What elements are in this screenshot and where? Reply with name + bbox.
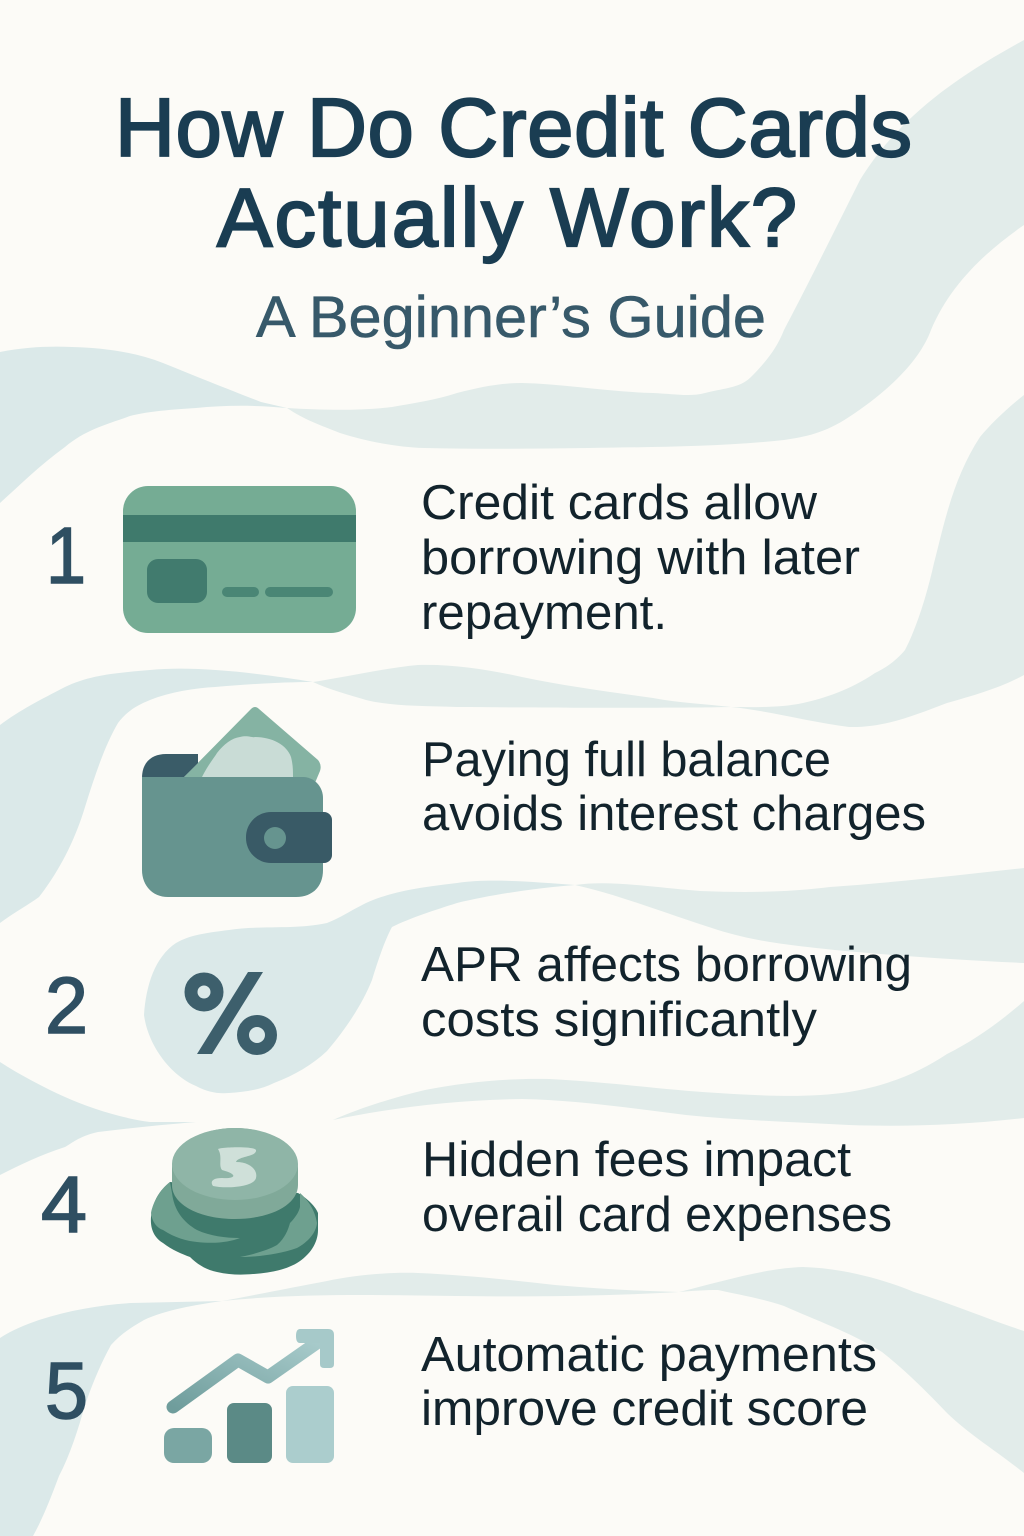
title xyxy=(115,81,912,264)
text: step 1: repayment. xyxy=(421,586,667,640)
text: step 3 APR: costs significantly xyxy=(421,993,818,1047)
number 4: 4 xyxy=(41,1160,87,1249)
text: step 2 paying: Paying full balance xyxy=(422,733,831,787)
title: Actually Work? xyxy=(217,171,797,264)
icon: credit card xyxy=(123,486,356,633)
text: step 5 payments: Automatic payments xyxy=(421,1328,877,1382)
text: step 3 APR: APR affects borrowing xyxy=(421,938,912,992)
text: step 4 fees: Hidden fees impact xyxy=(422,1133,851,1187)
text: step 2 paying xyxy=(422,733,926,841)
subtitle: A Beginner’s Guide xyxy=(256,285,766,350)
text: step 5 payments xyxy=(421,1328,877,1436)
text: step 4 fees: overail card expenses xyxy=(422,1188,892,1242)
text: step 1: Credit cards allow xyxy=(421,476,818,530)
number 2: 2 xyxy=(45,961,88,1050)
text: step 1 xyxy=(421,476,860,640)
text: step 4 fees xyxy=(422,1133,892,1242)
number 1: 1 xyxy=(46,511,86,600)
icon: growth chart xyxy=(164,1329,334,1463)
icon: wallet with banknote xyxy=(142,707,332,897)
title: How Do Credit Cards xyxy=(115,81,912,174)
icon: percent sign xyxy=(191,972,271,1054)
icon: coin stack xyxy=(151,1128,318,1275)
text: step 3 APR xyxy=(421,938,912,1047)
text: step 1: borrowing with later xyxy=(421,531,860,585)
number 5: 5 xyxy=(45,1346,88,1435)
text: step 5 payments: improve credit score xyxy=(421,1382,868,1436)
text: step 2 paying: avoids interest charges xyxy=(422,787,926,841)
